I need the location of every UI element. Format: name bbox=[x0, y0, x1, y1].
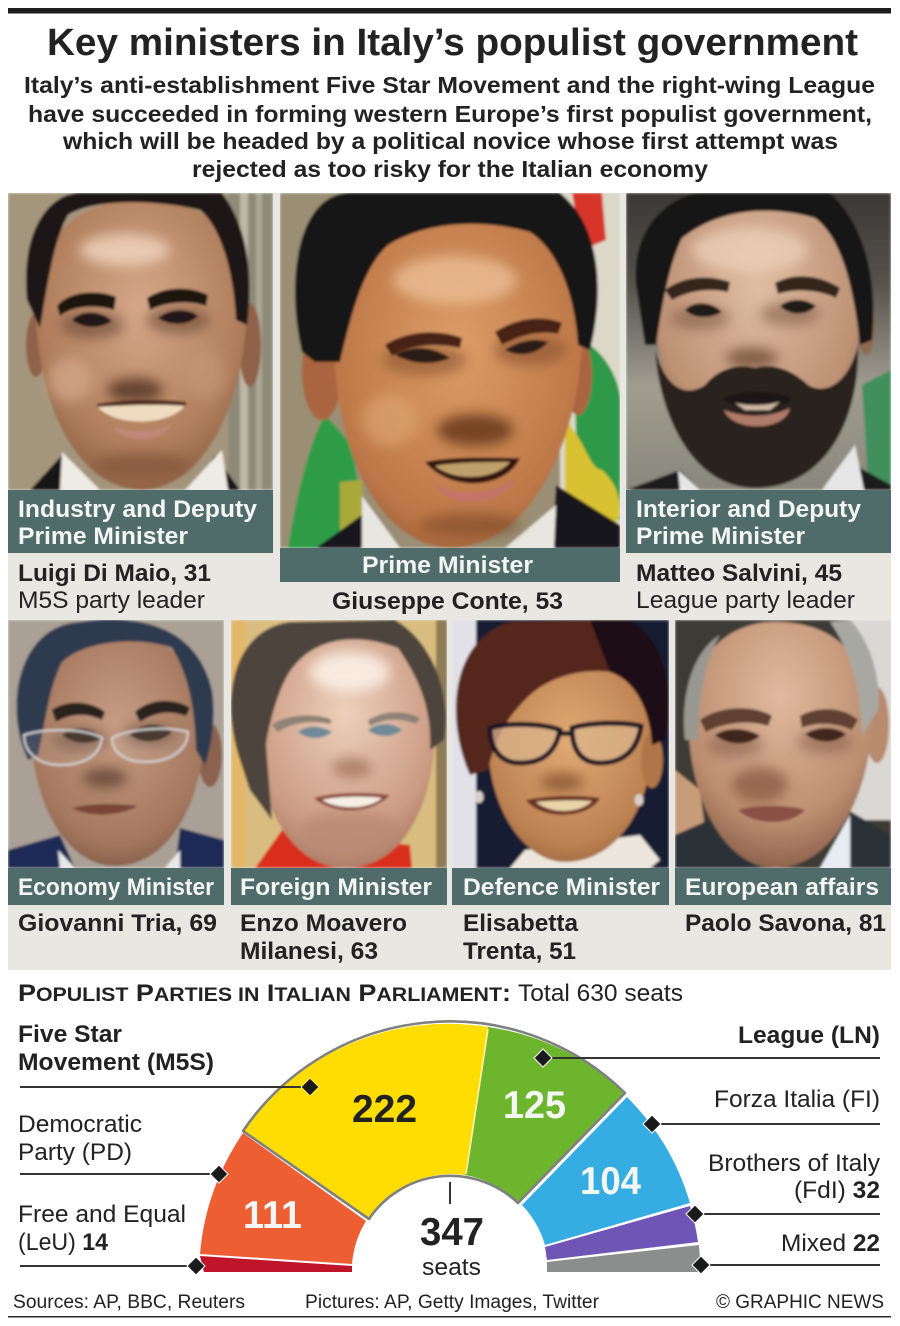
label: Brothers of Italy: Brothers of Italy bbox=[708, 1150, 880, 1177]
role band: Foreign Minister: Foreign Minister bbox=[240, 874, 432, 901]
label: Democratic Party: Democratic bbox=[18, 1111, 142, 1138]
role band: European affairs bbox=[675, 868, 891, 905]
label: Mixed bbox=[692, 1230, 880, 1274]
name: Matteo Salvini: Matteo Salvini, 45 bbox=[636, 560, 842, 587]
intro text: Italy’s anti-establishment Five Star Movement and the right-wing League bbox=[24, 72, 875, 98]
majority total: 347 seats: seats bbox=[422, 1254, 481, 1281]
segment: Forza Italia 104 bbox=[522, 1097, 690, 1245]
name: Luigi Di Maio: Luigi Di Maio, 31 bbox=[18, 560, 211, 587]
intro text bbox=[24, 72, 875, 182]
title: Key ministers in Italy’s populist government bbox=[47, 22, 858, 64]
segment: League 125 bbox=[465, 1027, 625, 1203]
label: Free and Equal: Free and Equal bbox=[18, 1201, 186, 1228]
footer: sources and credits: © GRAPHIC NEWS bbox=[716, 1292, 884, 1313]
label: Five Star Movement: Five Star bbox=[18, 1021, 122, 1048]
majority outline bbox=[243, 1021, 625, 1219]
panel: Matteo Salvini bbox=[626, 193, 891, 614]
role band: Foreign Minister bbox=[231, 868, 447, 905]
footer: sources and credits bbox=[13, 1292, 884, 1313]
seat numbers: 222 bbox=[352, 1088, 417, 1131]
seat numbers: 111 bbox=[243, 1194, 302, 1237]
name: Giuseppe Conte: Giuseppe Conte, 53 bbox=[332, 588, 563, 615]
name: Elisabetta Trenta: Elisabetta bbox=[463, 910, 579, 937]
role band: Defence Minister: Defence Minister bbox=[463, 874, 660, 901]
portrait: Trenta bbox=[452, 620, 669, 868]
role band: Industry and Deputy Prime Minister: Industry and Deputy bbox=[18, 496, 257, 523]
majority total: 347 seats: 347 bbox=[420, 1211, 484, 1254]
segment: Brothers of Italy 32 bbox=[545, 1206, 698, 1260]
segment: Five Star Movement 222 bbox=[243, 1024, 488, 1219]
name: Matteo Salvini bbox=[636, 560, 855, 614]
seat numbers bbox=[243, 1084, 641, 1237]
portrait: Conte bbox=[280, 193, 620, 548]
role band: European affairs: European affairs bbox=[685, 874, 879, 901]
panel: Giovanni Tria bbox=[8, 620, 224, 937]
footer: sources and credits: Pictures: AP, Getty Images, Twitter bbox=[305, 1292, 600, 1313]
majority total: 347 seats bbox=[420, 1182, 484, 1281]
label: League bbox=[534, 1022, 880, 1067]
role band: Prime Minister: Prime Minister bbox=[362, 552, 533, 579]
top rule bbox=[8, 8, 891, 14]
seat numbers: 104 bbox=[580, 1160, 641, 1203]
label: Mixed: Mixed 22 bbox=[781, 1230, 880, 1257]
portrait: Di Maio bbox=[8, 193, 273, 490]
portrait: Tria bbox=[8, 620, 224, 868]
label: Brothers of Italy: (FdI) 32 bbox=[794, 1177, 880, 1204]
label: Five Star Movement: Movement (M5S) bbox=[18, 1049, 214, 1076]
role band: Industry and Deputy Prime Minister: Prime Minister bbox=[18, 523, 188, 550]
label: Brothers of Italy bbox=[686, 1150, 880, 1223]
panel: Luigi Di Maio bbox=[8, 193, 273, 614]
label: Democratic Party: Party (PD) bbox=[18, 1139, 132, 1166]
seat numbers: 125 bbox=[503, 1084, 566, 1127]
role band: Interior and Deputy Prime Minister: Interior and Deputy bbox=[636, 496, 861, 523]
label: Forza Italia: Forza Italia (FI) bbox=[714, 1086, 880, 1113]
footer: sources and credits: Sources: AP, BBC, Reuters bbox=[13, 1292, 245, 1313]
name: Enzo Moavero Milanesi bbox=[240, 910, 407, 965]
role band: Economy Minister bbox=[8, 868, 224, 905]
portrait: Moavero bbox=[231, 620, 447, 868]
name: Enzo Moavero Milanesi: Enzo Moavero bbox=[240, 910, 407, 937]
panel: ministers background bbox=[8, 193, 891, 970]
role band: Industry and Deputy Prime Minister bbox=[8, 490, 273, 553]
role band: Prime Minister bbox=[280, 548, 620, 582]
chart: parliament seats hemicycle bbox=[200, 1021, 700, 1272]
name: Elisabetta Trenta: Trenta, 51 bbox=[463, 938, 576, 965]
name: Paolo Savona: Paolo Savona, 81 bbox=[685, 910, 886, 937]
segment: Free and Equal 14 bbox=[200, 1256, 352, 1272]
intro text: have succeeded in forming western Europe’s first populist government, bbox=[28, 101, 872, 127]
role band: Interior and Deputy Prime Minister: Prime Minister bbox=[636, 523, 805, 550]
label: Free and Equal: (LeU) 14 bbox=[18, 1229, 109, 1256]
name: Giovanni Tria: Giovanni Tria, 69 bbox=[18, 910, 217, 937]
name: Matteo Salvini: League party leader bbox=[636, 587, 855, 614]
label: Free and Equal bbox=[18, 1201, 205, 1275]
panel: Enzo Moavero Milanesi bbox=[231, 620, 447, 965]
segment: Mixed 22 bbox=[547, 1245, 700, 1272]
divider between Five Star and League bbox=[466, 1029, 488, 1174]
name: Elisabetta Trenta bbox=[463, 910, 579, 965]
chart heading: POPULIST PARTIES IN ITALIAN PARLIAMENT : bbox=[18, 980, 511, 1007]
label: Forza Italia bbox=[643, 1086, 880, 1133]
panel: Elisabetta Trenta bbox=[452, 620, 669, 965]
portrait: Salvini bbox=[626, 193, 891, 490]
intro text: which will be headed by a political novice whose first attempt was bbox=[62, 128, 838, 154]
bottom rule bbox=[8, 1316, 891, 1318]
label: League: League (LN) bbox=[738, 1022, 880, 1049]
name: Luigi Di Maio: M5S party leader bbox=[18, 587, 205, 614]
chart heading: Total 630 seats bbox=[518, 980, 683, 1007]
intro text: rejected as too risky for the Italian economy bbox=[192, 156, 708, 182]
role band: Economy Minister: Economy Minister bbox=[18, 874, 214, 901]
label: Five Star Movement bbox=[18, 1021, 319, 1096]
name: Luigi Di Maio bbox=[18, 560, 211, 614]
panel: Paolo Savona bbox=[675, 620, 891, 937]
role band: Interior and Deputy Prime Minister bbox=[626, 490, 891, 553]
segment: Democratic Party 111 bbox=[200, 1133, 366, 1264]
label: Democratic Party bbox=[18, 1111, 228, 1183]
name: Enzo Moavero Milanesi: Milanesi, 63 bbox=[240, 938, 378, 965]
panel: Giuseppe Conte bbox=[280, 193, 620, 615]
portrait: Savona bbox=[675, 620, 891, 868]
role band: Defence Minister bbox=[452, 868, 669, 905]
